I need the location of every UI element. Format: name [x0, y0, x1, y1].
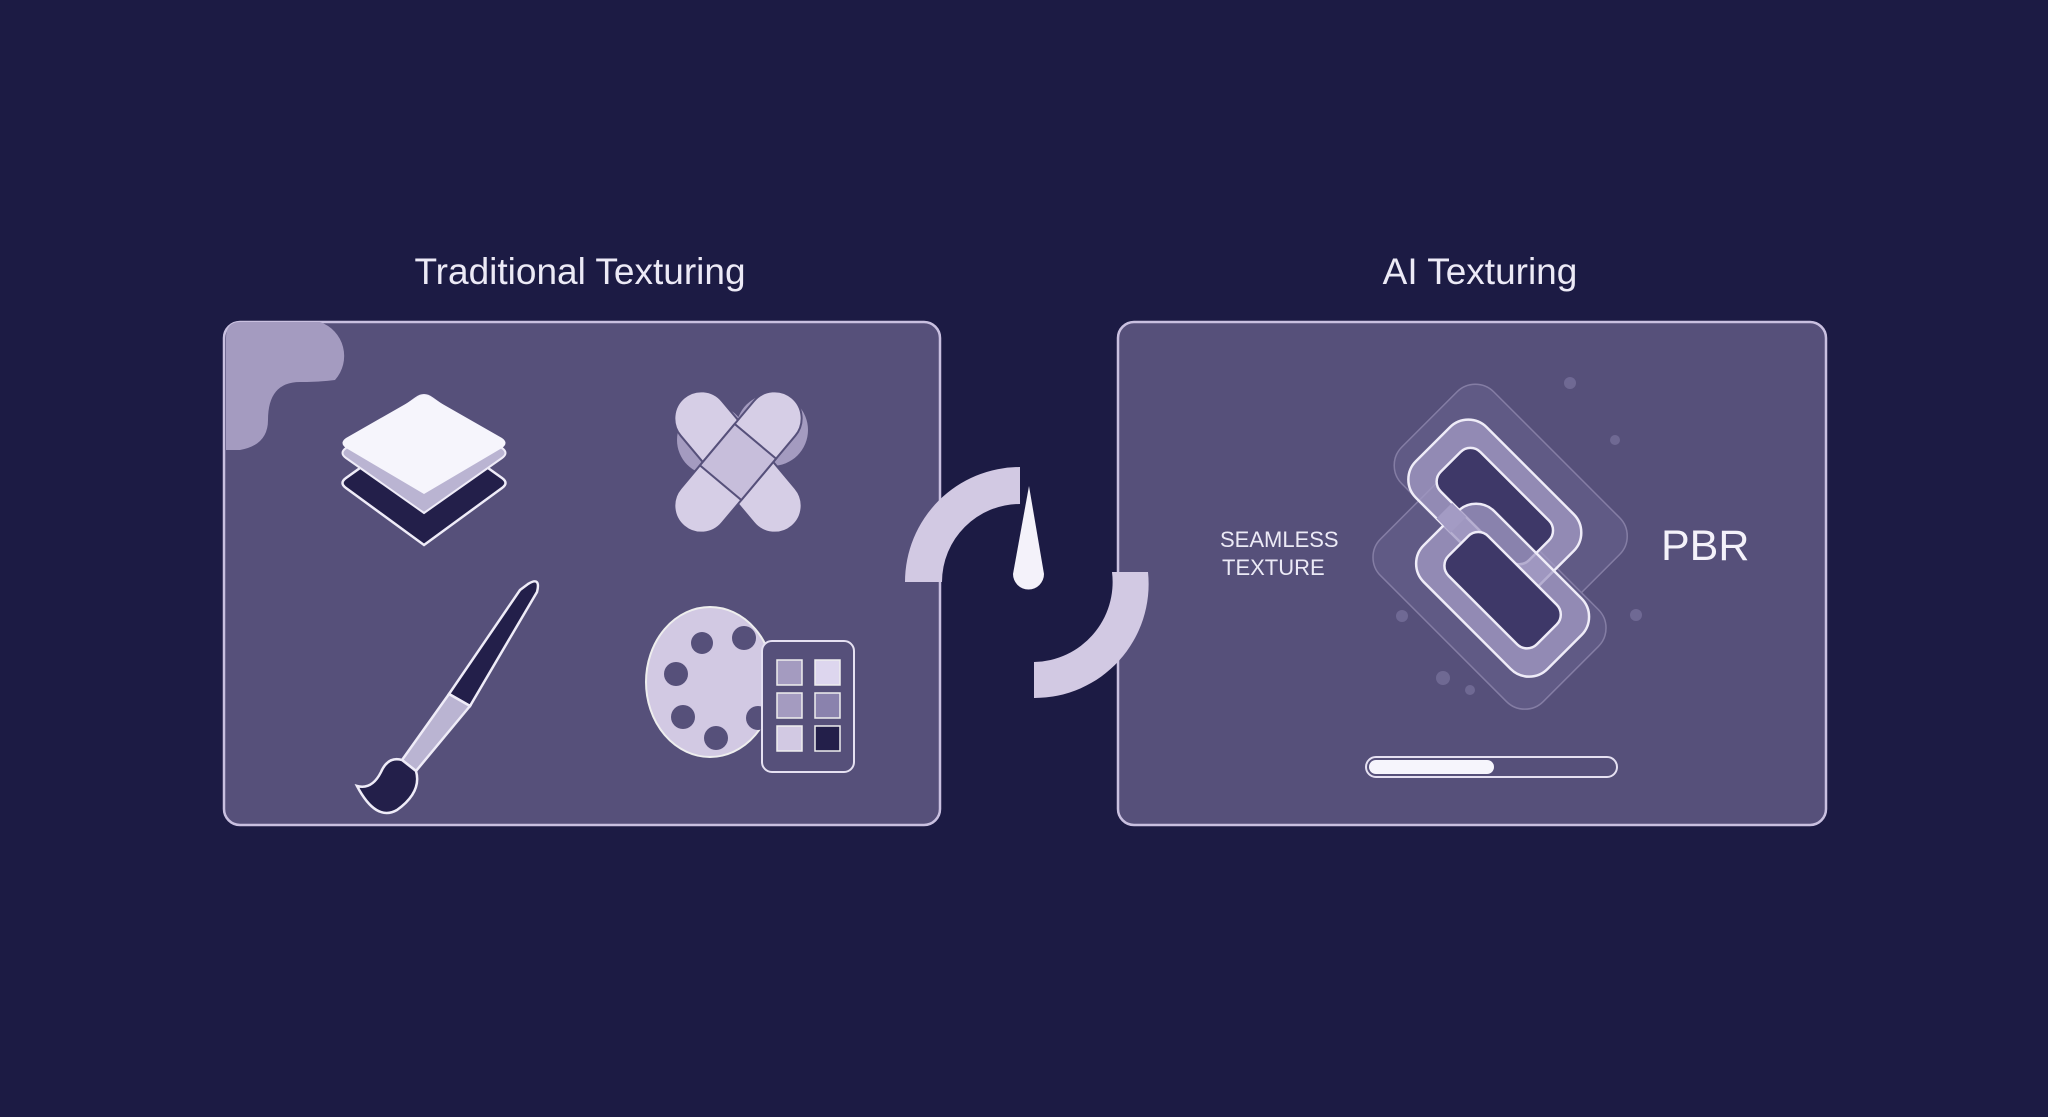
icon: paintbrush [357, 581, 538, 813]
text: seamless texture: TEXTURE [1222, 555, 1325, 580]
title: AI: AI Texturing [1383, 251, 1577, 292]
gauge arrow: bottom-right arc [1034, 572, 1149, 698]
corner blob [226, 322, 344, 450]
icon: bandage [663, 380, 813, 544]
text: PBR: PBR [1661, 522, 1749, 570]
text: seamless texture: SEAMLESS [1220, 527, 1339, 552]
title: traditional: Traditional Texturing [414, 251, 746, 292]
panel: AI [1118, 322, 1826, 825]
panel: traditional [224, 322, 940, 825]
progress bar [1366, 757, 1617, 777]
icon: palette [646, 607, 854, 772]
icon: chain link [1327, 373, 1673, 720]
gauge needle [1013, 486, 1044, 590]
icon: layers [342, 395, 506, 545]
gauge arrow: top-left arc [905, 467, 1020, 582]
